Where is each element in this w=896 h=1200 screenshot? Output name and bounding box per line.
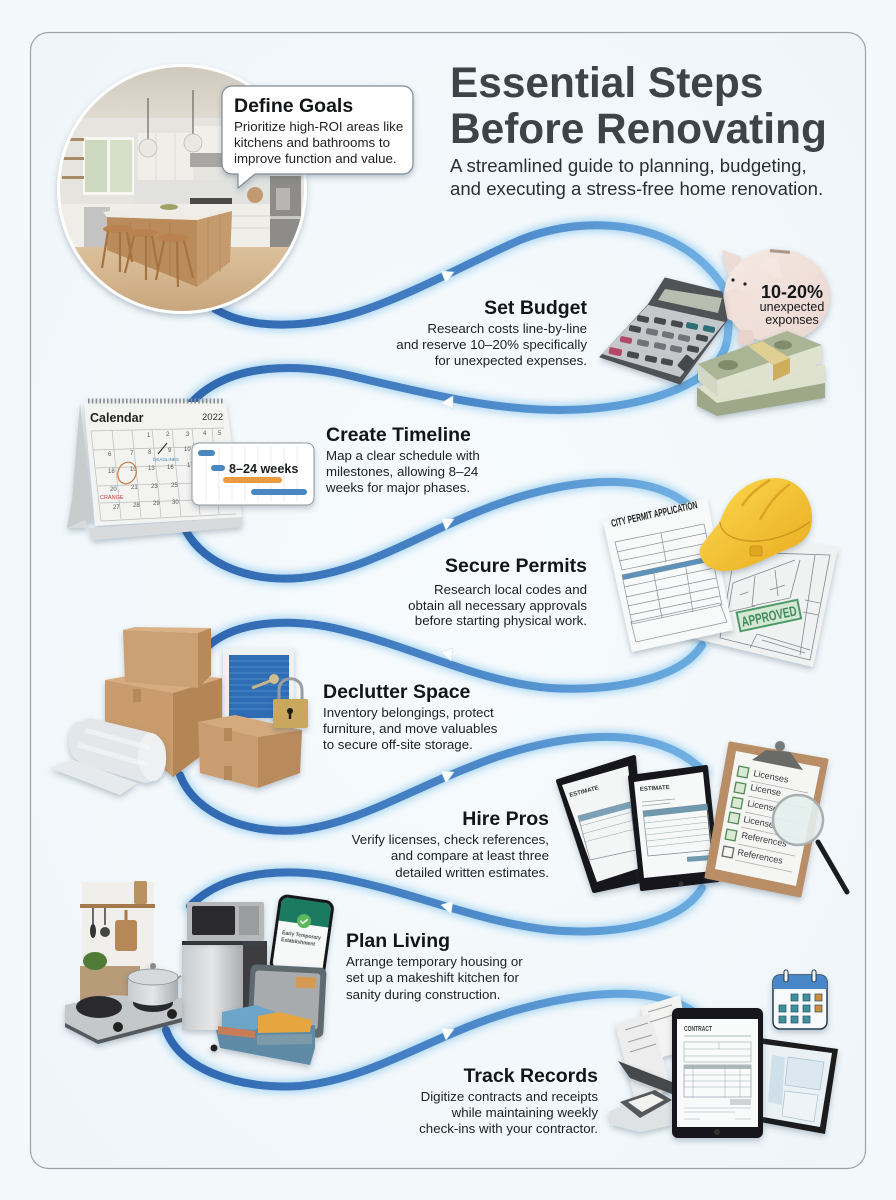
icon: phone bbox=[269, 893, 335, 979]
icon: bubble wrap roll bbox=[50, 718, 168, 795]
icon: microwave bbox=[187, 902, 264, 941]
illustration: kitchen photo circle bbox=[55, 60, 310, 315]
flow arrows bbox=[441, 271, 454, 1040]
heading: Hire Pros bbox=[462, 808, 549, 830]
body text bbox=[323, 705, 498, 752]
body text bbox=[408, 582, 587, 628]
icon: tablet estimate back bbox=[558, 757, 645, 891]
callout: pig label bbox=[760, 282, 824, 327]
subtitle: and executing a stress-free home renovation. bbox=[450, 178, 823, 199]
icon: hard hat bbox=[700, 478, 812, 571]
body text: check-ins with your contractor. bbox=[419, 1121, 598, 1136]
icon: storage door bbox=[223, 648, 294, 718]
icon: tablet estimate front: ESTIMATE bbox=[640, 785, 670, 793]
body text: and reserve 10–20% specifically bbox=[396, 337, 587, 352]
icon: receipts bbox=[615, 995, 690, 1100]
callout text bbox=[234, 119, 403, 166]
icon: clipboard checklist: Licenses bbox=[753, 768, 790, 785]
step 3: create timeline bbox=[67, 401, 480, 540]
title bbox=[450, 59, 827, 152]
icon: desk calendar: 30 bbox=[172, 500, 179, 506]
body text: Digitize contracts and receipts bbox=[421, 1089, 598, 1104]
body text: Inventory belongings, protect bbox=[323, 705, 494, 720]
body text bbox=[325, 448, 480, 495]
body text: Research local codes and bbox=[434, 582, 587, 597]
icon: open suitcase bbox=[210, 964, 327, 1065]
callout bubble bbox=[222, 86, 413, 188]
heading: Set Budget bbox=[484, 297, 588, 319]
body text: while maintaining weekly bbox=[451, 1105, 598, 1120]
icon: stacked cardboard boxes bbox=[105, 627, 302, 788]
icon: mini fridge bbox=[182, 941, 267, 1030]
callout: pig label: unexpected bbox=[760, 300, 824, 314]
icon: desk calendar: 28 bbox=[133, 503, 140, 509]
icon: main tablet contract bbox=[672, 1008, 763, 1138]
icon: permit application form bbox=[603, 498, 733, 652]
icon: desk calendar bbox=[67, 401, 242, 540]
icon: desk calendar: 17 bbox=[187, 463, 194, 469]
callout: pig label: exponses bbox=[765, 313, 819, 327]
icon: pegboard with kitchen tools bbox=[80, 881, 155, 1004]
stamp: approved: APPROVED bbox=[740, 602, 798, 630]
icon: desk calendar: 10 bbox=[130, 467, 137, 473]
icon: desk calendar: 10 bbox=[184, 447, 191, 453]
icon: padlock and key bbox=[252, 674, 308, 728]
step 4: secure permits bbox=[408, 478, 838, 667]
body text: milestones, allowing 8–24 bbox=[326, 464, 478, 479]
body text: set up a makeshift kitchen for bbox=[346, 970, 520, 985]
body text: to secure off-site storage. bbox=[323, 737, 473, 752]
icon: clipboard checklist bbox=[706, 741, 827, 896]
callout text: kitchens and bathrooms to bbox=[234, 135, 390, 150]
icon: phone: Early Temporary bbox=[282, 930, 321, 942]
icon: scanner bbox=[608, 1061, 672, 1132]
gantt card: 8–24 weeks bbox=[229, 462, 298, 476]
icon: desk calendar: 7 bbox=[130, 451, 134, 457]
heading: Track Records bbox=[464, 1065, 598, 1087]
icon: clipboard checklist: License bbox=[750, 782, 782, 798]
step 2: set budget bbox=[396, 249, 830, 416]
icon: desk calendar: 2022 bbox=[202, 412, 223, 423]
icon: desk calendar: 1 bbox=[147, 433, 151, 439]
icon: hot plate and pot bbox=[65, 963, 182, 1044]
icon: tablet estimate back: ESTIMATE bbox=[569, 785, 599, 799]
icon: desk calendar: 3 bbox=[186, 432, 190, 438]
body text: obtain all necessary approvals bbox=[408, 598, 587, 613]
step 6: hire pros bbox=[352, 741, 847, 896]
icon: desk calendar: 2 bbox=[166, 432, 170, 438]
body text bbox=[419, 1089, 598, 1136]
icon: calendar bbox=[773, 970, 827, 1029]
body text: before starting physical work. bbox=[415, 613, 587, 628]
step 5: declutter space bbox=[50, 627, 498, 795]
body text: and compare at least three bbox=[391, 848, 549, 863]
icon: desk calendar: 29 bbox=[153, 501, 160, 507]
icon: piggy bank bbox=[721, 249, 830, 345]
step 8: track records bbox=[419, 970, 838, 1138]
callout text: improve function and value. bbox=[234, 151, 397, 166]
body text: Verify licenses, check references, bbox=[352, 832, 549, 847]
winding path ribbon bbox=[166, 225, 729, 1087]
icon: tablet estimate front bbox=[630, 767, 718, 889]
icon: desk calendar: 25 bbox=[171, 483, 178, 489]
subtitle bbox=[450, 155, 823, 199]
icon: clipboard checklist: License bbox=[743, 814, 775, 830]
body text: Arrange temporary housing or bbox=[346, 954, 523, 969]
icon: desk calendar: 5 bbox=[218, 431, 222, 437]
body text bbox=[396, 321, 587, 368]
callout: pig label: 10-20% bbox=[761, 282, 823, 302]
icon: desk calendar: 27 bbox=[113, 505, 120, 511]
title: Before Renovating bbox=[450, 105, 827, 152]
stamp: approved bbox=[737, 600, 801, 631]
heading: Create Timeline bbox=[326, 424, 471, 446]
icon: desk calendar: 18 bbox=[108, 469, 115, 475]
callout heading: Define Goals bbox=[234, 95, 353, 117]
icon: clipboard checklist: License bbox=[747, 798, 779, 814]
callout text: Prioritize high-ROI areas like bbox=[234, 119, 403, 134]
body text: Map a clear schedule with bbox=[326, 448, 480, 463]
heading: Secure Permits bbox=[445, 555, 587, 577]
icon: desk calendar: 4 bbox=[203, 431, 207, 437]
title: Essential Steps bbox=[450, 59, 763, 106]
icon: desk calendar: 13 bbox=[148, 466, 155, 472]
step 7: plan living bbox=[65, 881, 523, 1065]
icon: calculator bbox=[600, 278, 727, 384]
icon: desk calendar: 9 bbox=[168, 448, 172, 454]
heading: Declutter Space bbox=[323, 681, 471, 703]
body text: sanity during construction. bbox=[346, 987, 500, 1002]
icon: desk calendar: 8 bbox=[148, 450, 152, 456]
body text: for unexpected expenses. bbox=[435, 353, 587, 368]
body text: detailed written estimates. bbox=[395, 865, 549, 880]
body text: furniture, and move valuables bbox=[323, 721, 498, 736]
icon: desk calendar: 20 bbox=[110, 487, 117, 493]
icon: desk calendar: Calendar bbox=[90, 411, 144, 425]
gantt card bbox=[192, 443, 314, 505]
icon: main tablet contract: CONTRACT bbox=[684, 1026, 713, 1033]
step 1: define goals bbox=[55, 60, 413, 315]
icon: desk calendar: 6 bbox=[108, 452, 112, 458]
icon: clipboard checklist: References bbox=[737, 847, 784, 866]
icon: desk calendar: 21 bbox=[131, 485, 138, 491]
subtitle: A streamlined guide to planning, budgeting, bbox=[450, 155, 807, 176]
icon: second tablet bbox=[760, 1038, 838, 1134]
icon: magnifying glass bbox=[773, 795, 847, 892]
body text bbox=[352, 832, 549, 880]
icon: desk calendar: 23 bbox=[151, 484, 158, 490]
body text: Research costs line-by-line bbox=[427, 321, 587, 336]
icon: phone: Establishment bbox=[281, 937, 316, 948]
body text bbox=[346, 954, 523, 1002]
icon: desk calendar: 16 bbox=[167, 465, 174, 471]
icon: cash stacks bbox=[697, 331, 825, 416]
icon: desk calendar: CRANGE bbox=[100, 495, 124, 501]
icon: desk calendar: DEADLINES bbox=[153, 457, 179, 462]
icon: blueprint bbox=[680, 530, 838, 667]
icon: clipboard checklist: References bbox=[741, 830, 788, 849]
heading: Plan Living bbox=[346, 930, 450, 952]
icon: permit application form: CITY PERMIT APPLICATION bbox=[610, 499, 699, 530]
body text: weeks for major phases. bbox=[325, 480, 470, 495]
